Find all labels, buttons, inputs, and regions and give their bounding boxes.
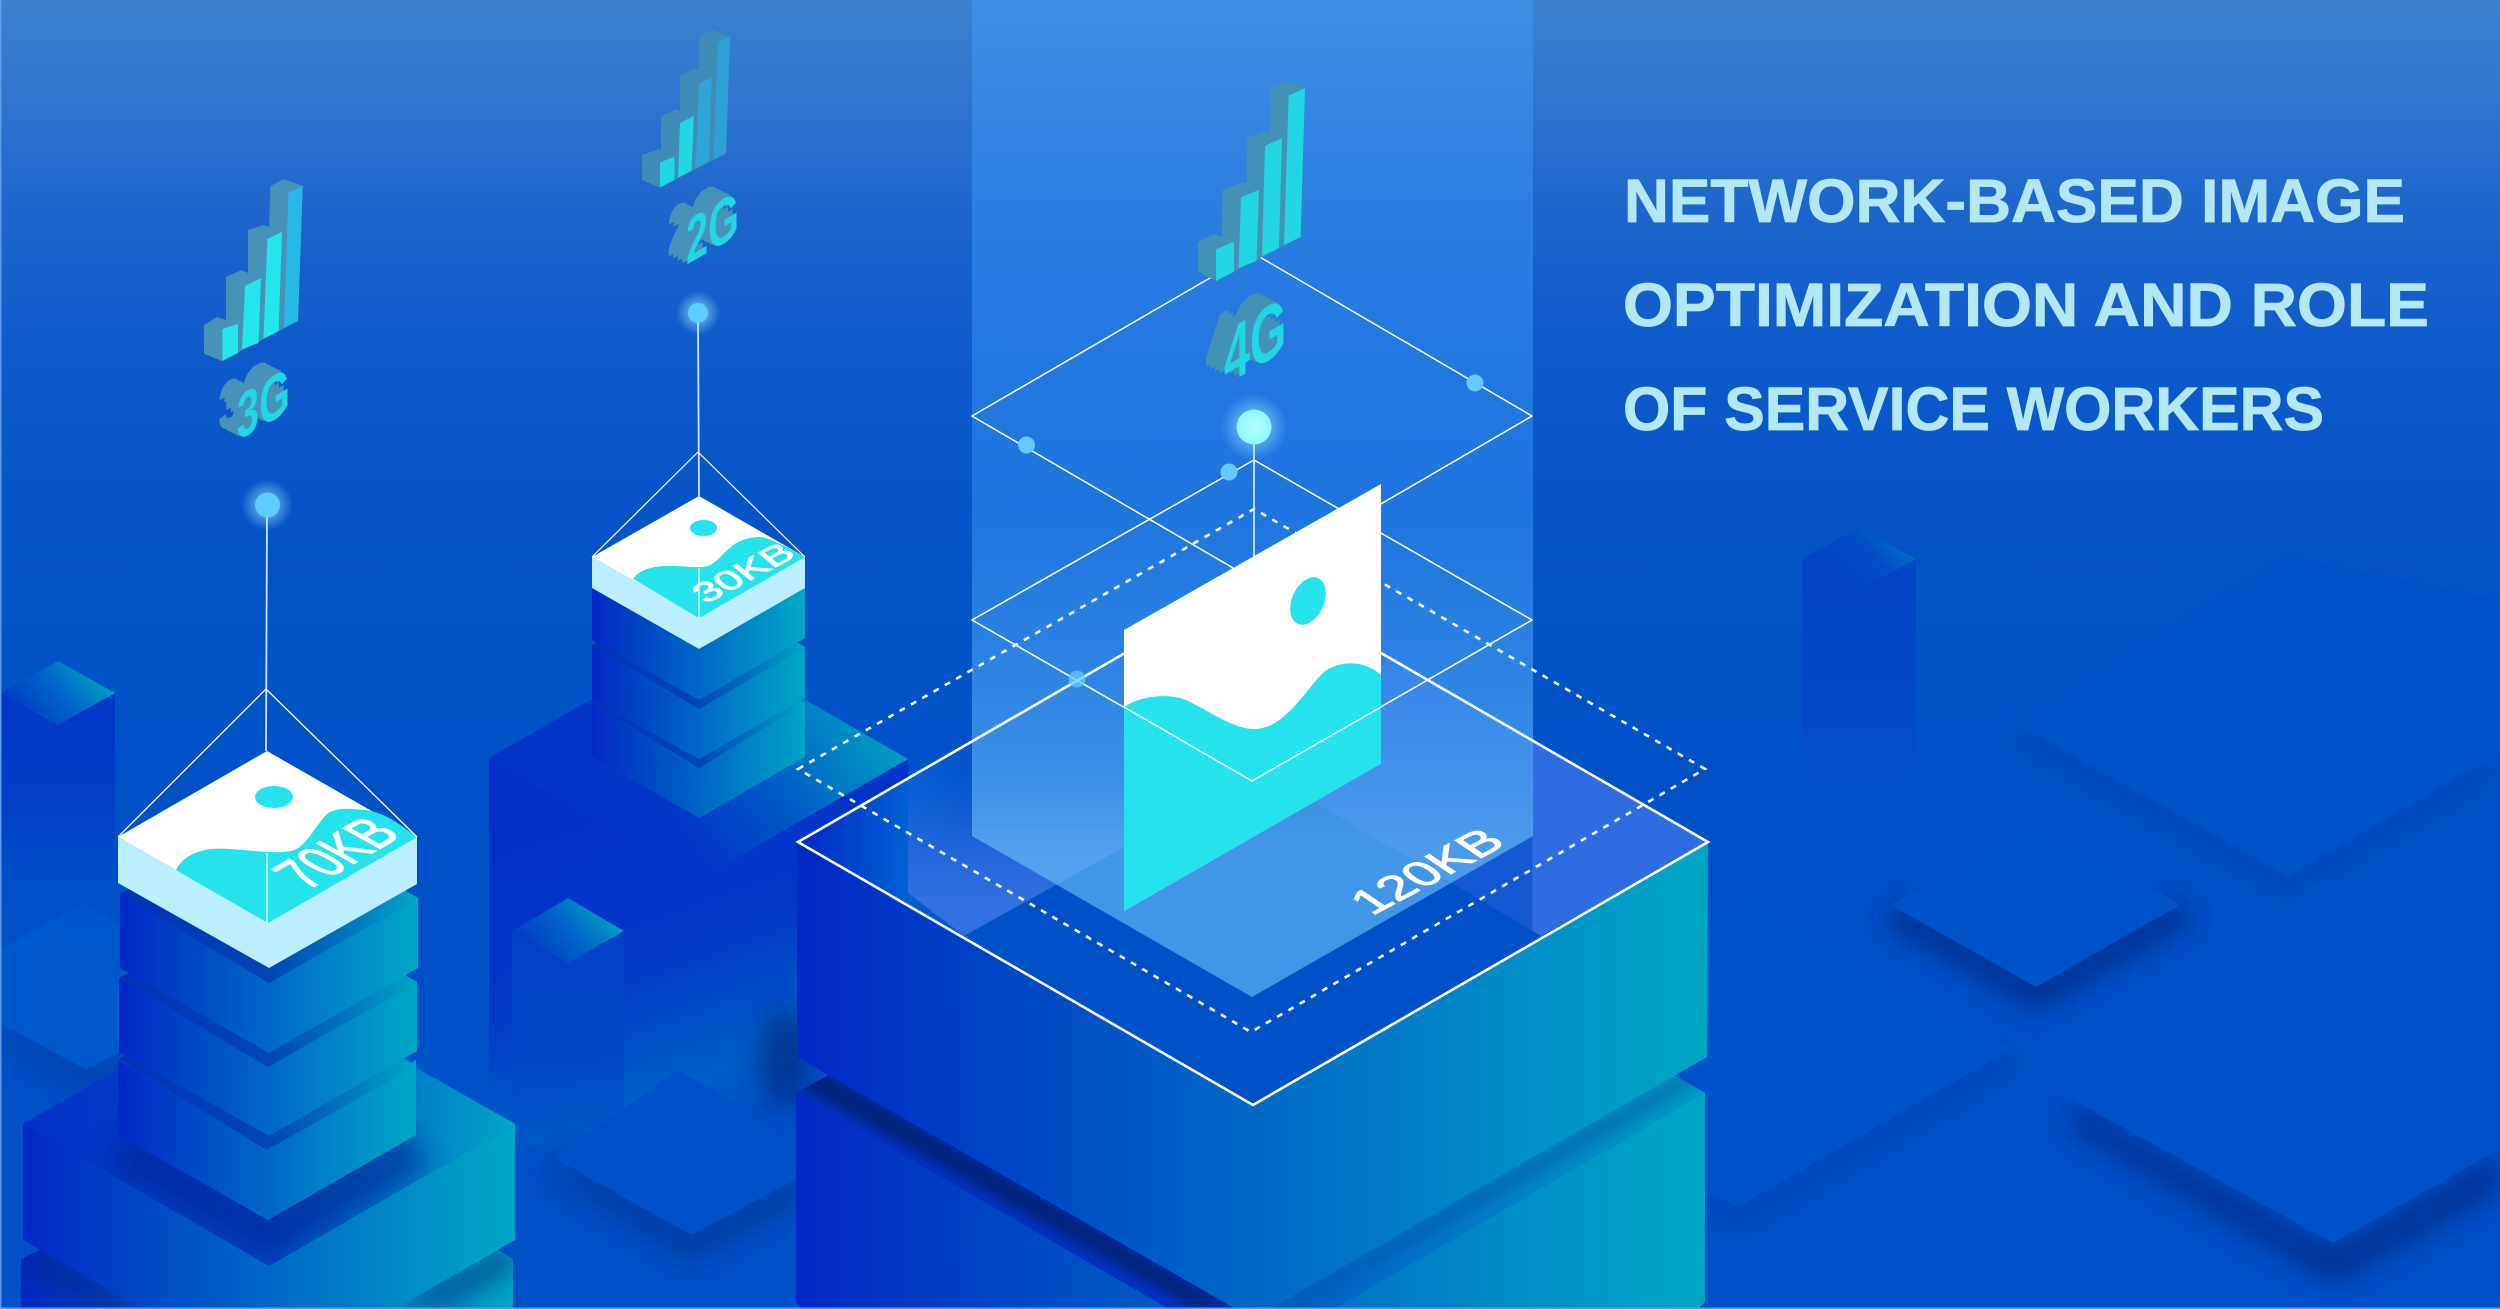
signal bars icon 4G — [1198, 81, 1305, 281]
background block: large bottom right — [2057, 880, 2500, 1286]
wireframe plane upper — [972, 253, 1532, 579]
title: OPTIMIZATION AND ROLE — [1623, 271, 2429, 339]
network label 3G: 3G — [232, 351, 285, 453]
background column: far left — [1, 661, 115, 930]
wireframe node dots — [1018, 374, 1484, 688]
network label 3G: 3G — [237, 353, 290, 455]
solid outline of platform — [798, 579, 1708, 1105]
tower block 1 — [592, 588, 805, 700]
glow right on platform — [1311, 655, 1708, 936]
network label 3G: 3G — [228, 348, 281, 450]
background hexagon: far left — [0, 903, 130, 1082]
background block: upper right hexagon — [2016, 557, 2500, 884]
network label 4G: 4G — [1210, 273, 1273, 397]
wireframe plane lower — [972, 460, 1532, 781]
label 120KB: 120KB — [1338, 821, 1516, 922]
signal node 3G — [241, 479, 293, 531]
lower platform block — [796, 1057, 1707, 1309]
platform top face — [798, 579, 1708, 1105]
tower block 2 — [119, 895, 417, 1136]
image tile 30KB — [592, 496, 805, 649]
title: NETWORK-BASED IMAGE — [1624, 167, 2405, 235]
network label 3G — [219, 344, 290, 455]
network label 4G: 4G — [1224, 280, 1286, 403]
2G tower stack — [592, 291, 805, 818]
cast shadow left of the central base — [759, 1010, 811, 1110]
tower block 1 — [120, 810, 418, 1053]
upper pedestal block — [23, 1064, 515, 1306]
suspension lines 3G — [118, 510, 417, 837]
network label 2G: 2G — [668, 168, 721, 270]
3G pedestal base — [21, 1064, 515, 1308]
network label 4G: 4G — [1220, 278, 1282, 401]
dashed outline plane — [798, 509, 1705, 1032]
label 30KB: 30KB — [684, 537, 804, 609]
central platform — [796, 0, 1708, 1309]
network label 2G: 2G — [672, 170, 725, 272]
background tile: small diamond with shadow — [1891, 819, 2186, 996]
3G tower stack — [118, 479, 418, 1220]
network label 2G: 2G — [686, 177, 739, 279]
background block: lower middle hexagon — [1700, 892, 2015, 1214]
title: OF SERVICE WORKERS — [1623, 375, 2324, 443]
translucent light beam — [972, 0, 1533, 997]
tower block 2 — [592, 585, 805, 759]
background column: right — [1802, 528, 1916, 830]
signal bars icon 3G — [204, 179, 303, 361]
network label 2G — [668, 168, 739, 279]
network label 3G: 3G — [224, 346, 276, 448]
lower pedestal block — [21, 1250, 513, 1308]
background shapes: left side blocks — [0, 638, 908, 1246]
image tile 70KB — [118, 751, 417, 968]
suspension lines 2G — [592, 318, 805, 557]
connector line from 4G node — [1253, 440, 1255, 560]
network label 4G: 4G — [1215, 275, 1277, 399]
signal node 2G — [676, 291, 720, 335]
tower block 3 — [118, 975, 416, 1220]
signal bars icon 2G — [642, 30, 730, 188]
network label 2G: 2G — [677, 172, 730, 274]
background hexagon: lower centre-left — [554, 1070, 800, 1246]
network label 4G: 4G — [1206, 271, 1268, 394]
background block behind 2G stack — [489, 638, 908, 1145]
image billboard — [1124, 484, 1381, 911]
tower block 3 — [592, 640, 805, 818]
label 70KB: 70KB — [259, 809, 415, 898]
title — [1623, 167, 2429, 443]
network label 2G: 2G — [682, 175, 734, 277]
upper platform sides — [797, 842, 1708, 1309]
background shapes: right side blocks — [1700, 528, 2500, 1286]
glow left on platform — [908, 658, 1126, 936]
background column: centre-left — [512, 898, 624, 1200]
network label 3G: 3G — [219, 344, 272, 446]
wireframe lower plane front edges over billboard — [1124, 707, 1381, 781]
signal node 4G — [1220, 393, 1288, 461]
